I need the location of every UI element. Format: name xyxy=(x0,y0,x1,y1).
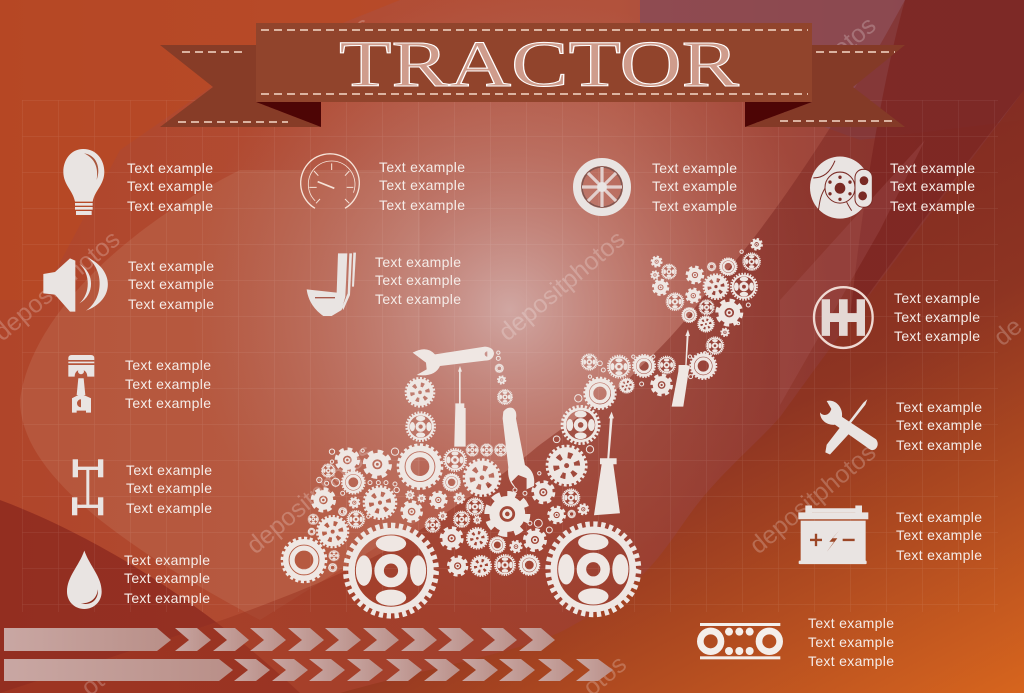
text block: gearbox: Text example xyxy=(894,328,980,344)
icon: horn xyxy=(43,257,108,312)
text block: oil: Text example xyxy=(124,590,210,606)
ribbon banner xyxy=(160,23,905,127)
text block: horn xyxy=(128,258,214,312)
icon: bucket xyxy=(307,253,356,316)
icon: battery xyxy=(798,505,868,564)
icon: gear shift xyxy=(814,287,873,348)
text block: tyre xyxy=(652,160,737,214)
text block: bulb xyxy=(127,160,213,214)
screwdriver: loader arm xyxy=(594,412,620,515)
text block: brake: Text example xyxy=(890,198,975,214)
text block: bulb: Text example xyxy=(127,178,213,194)
text block: gauge: Text example xyxy=(379,159,465,175)
icon: piston xyxy=(68,355,94,413)
text block: tools: Text example xyxy=(896,399,982,415)
text block: piston: Text example xyxy=(125,395,211,411)
text block: bulb: Text example xyxy=(127,160,213,176)
text block: gearbox: Text example xyxy=(894,290,980,306)
icon: speedometer xyxy=(299,151,365,217)
text block: chassis: Text example xyxy=(126,462,212,478)
text block: chassis xyxy=(126,462,212,516)
text block: track xyxy=(808,615,894,669)
text block: tyre: Text example xyxy=(652,178,737,194)
cab gears xyxy=(406,364,512,441)
icon: oil drop xyxy=(67,551,102,609)
text block: horn: Text example xyxy=(128,258,214,274)
watermarks: depositphotos xyxy=(493,225,630,347)
text block: piston: Text example xyxy=(125,376,211,392)
screwdriver: bucket xyxy=(672,329,690,407)
text block: bucket: Text example xyxy=(375,291,461,307)
text block: battery xyxy=(896,509,982,563)
screwdriver: cab xyxy=(454,366,466,447)
icon: tyre xyxy=(577,162,627,212)
icon: brake disc xyxy=(810,157,872,219)
icon: track xyxy=(700,623,780,659)
text block: oil: Text example xyxy=(124,570,210,586)
text block: oil: Text example xyxy=(124,552,210,568)
icon: crossed tools xyxy=(820,399,878,454)
watermarks: depositphotos xyxy=(744,11,881,133)
text block: piston xyxy=(125,357,211,411)
text block: tools: Text example xyxy=(896,437,982,453)
text block: tools: Text example xyxy=(896,417,982,433)
text block: bucket xyxy=(375,254,461,307)
big rear wheel xyxy=(548,524,638,614)
text block: battery: Text example xyxy=(896,509,982,525)
icon: chassis xyxy=(72,459,103,515)
text block: gauge xyxy=(379,159,465,213)
small rings xyxy=(317,250,750,533)
tractor made of gears xyxy=(283,239,762,616)
watermarks: depositphotos xyxy=(241,438,378,560)
text block: bucket: Text example xyxy=(375,254,461,270)
text block: chassis: Text example xyxy=(126,480,212,496)
text block: bucket: Text example xyxy=(375,272,461,288)
watermarks: depositphotos xyxy=(744,438,881,560)
arrow bars xyxy=(4,628,613,681)
text block: brake: Text example xyxy=(890,178,975,194)
text block: brake: Text example xyxy=(890,160,975,176)
text block: battery: Text example xyxy=(896,527,982,543)
text block: piston: Text example xyxy=(125,357,211,373)
wrench: top xyxy=(413,347,494,375)
icon: light bulb xyxy=(63,149,104,215)
body gears xyxy=(283,444,588,581)
text block: brake xyxy=(890,160,975,214)
big front wheel xyxy=(346,526,436,616)
text block: gauge: Text example xyxy=(379,177,465,193)
text block: chassis: Text example xyxy=(126,500,212,516)
wrench: vertical xyxy=(503,408,534,489)
text block: tools xyxy=(896,399,982,453)
loader bucket gears xyxy=(651,239,762,354)
text block: track: Text example xyxy=(808,634,894,650)
text block: horn: Text example xyxy=(128,276,214,292)
title: TRACTOR xyxy=(339,28,739,101)
watermarks: depositphotos xyxy=(239,11,376,133)
text block: gearbox xyxy=(894,290,980,344)
text block: tyre: Text example xyxy=(652,160,737,176)
loader arm gears xyxy=(562,353,716,443)
text block: oil xyxy=(124,552,210,606)
text block: track: Text example xyxy=(808,615,894,631)
text block: track: Text example xyxy=(808,653,894,669)
text block: gauge: Text example xyxy=(379,197,465,213)
text block: bulb: Text example xyxy=(127,198,213,214)
text block: tyre: Text example xyxy=(652,198,737,214)
text block: battery: Text example xyxy=(896,547,982,563)
text block: horn: Text example xyxy=(128,296,214,312)
text block: gearbox: Text example xyxy=(894,309,980,325)
